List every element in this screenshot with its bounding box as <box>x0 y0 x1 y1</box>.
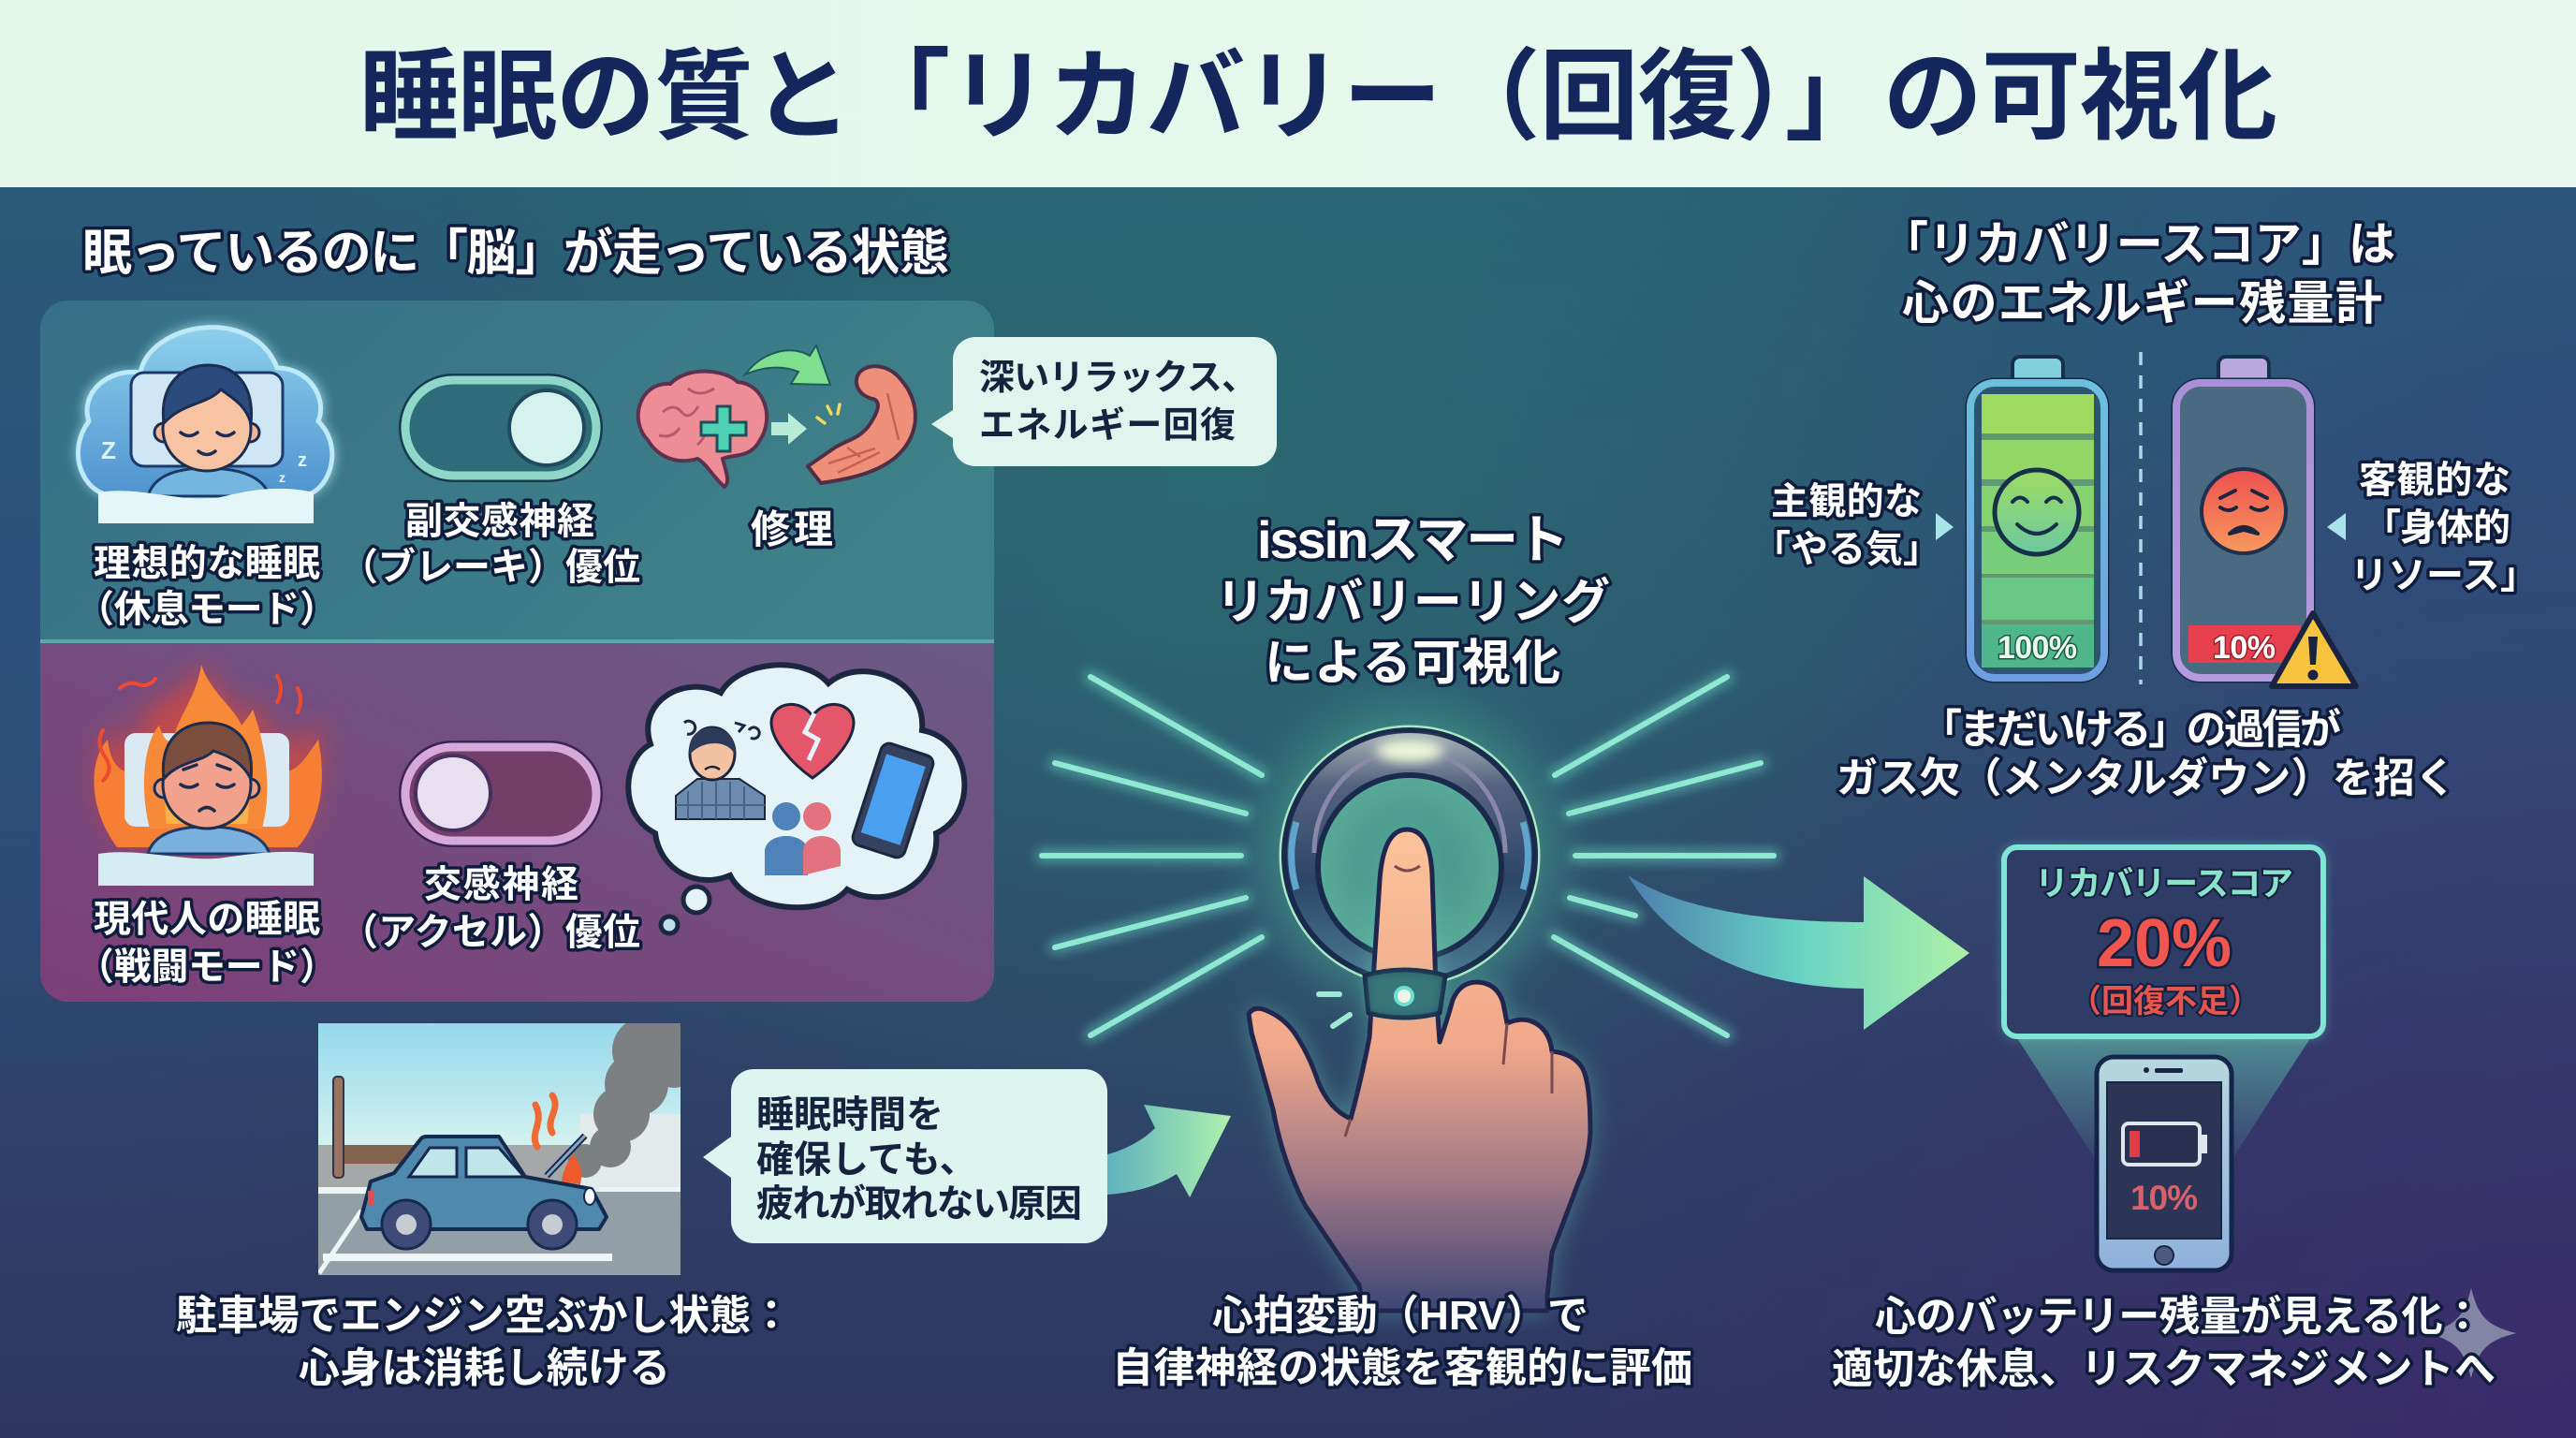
arrow: callout to hand <box>1107 1105 1231 1197</box>
people <box>765 802 841 875</box>
divider <box>2139 352 2143 684</box>
label: HRV caption <box>1112 1293 1692 1391</box>
callout: sleep hours: 睡眠時間を <box>756 1094 944 1136</box>
label: modern sleep: 現代人の睡眠 <box>94 899 320 940</box>
label: ideal sleep: 理想的な睡眠 <box>94 543 320 584</box>
label: ideal sleep: （休息モード） <box>77 589 337 630</box>
label: car caption: 心身は消耗し続ける <box>299 1345 670 1391</box>
icon: low battery objective: 10% <box>2213 630 2276 666</box>
icon: hand with ring <box>1249 829 1590 1311</box>
icon: accelerator toggle <box>403 745 598 843</box>
label: HRV caption: 心拍変動（HRV）で <box>1212 1293 1588 1339</box>
heading: ring visualisation: による可視化 <box>1265 637 1560 691</box>
broken heart <box>771 704 854 778</box>
watermark sparkle <box>2427 1288 2516 1378</box>
heading: ring visualisation: issinスマート <box>1257 510 1569 569</box>
car body <box>361 1137 607 1229</box>
label: ideal sleep <box>77 543 337 630</box>
heading: recovery score <box>1881 218 2395 330</box>
icon: muscle arm <box>808 366 915 483</box>
callout: deep relaxation: 深いリラックス、 <box>979 359 1257 398</box>
icon: full battery motivation: 100% <box>1998 630 2077 666</box>
icon: low battery objective <box>2174 357 2356 686</box>
label: subjective motivation: 「やる気」 <box>1753 529 1940 570</box>
icon: brain repair <box>638 372 767 487</box>
icon: brake toggle <box>403 378 598 477</box>
worried person <box>676 721 765 819</box>
icon: ideal sleep: Z <box>101 436 116 464</box>
icon: ideal sleep: z <box>279 470 285 485</box>
heading: recovery score: 心のエネルギー残量計 <box>1902 277 2382 330</box>
arrow: to muscle <box>771 413 807 445</box>
label: car caption <box>176 1293 792 1391</box>
label: modern sleep <box>77 899 337 988</box>
smartphone <box>851 741 935 859</box>
callout: sleep hours <box>703 1069 1107 1243</box>
label: objective resources <box>2327 460 2538 596</box>
label: battery visibility caption: 心のバッテリー残量が見える化： <box>1875 1294 2483 1340</box>
label: objective resources: 客観的な <box>2359 460 2510 501</box>
label: overconfidence warning: ガス欠（メンタルダウン）を招く <box>1837 756 2456 801</box>
panel: sleep comparison <box>40 301 994 1002</box>
illustration: car idling in parking lot <box>318 1023 681 1275</box>
label: car caption: 駐車場でエンジン空ぶかし状態： <box>176 1293 792 1339</box>
label: parasympathetic <box>341 501 640 588</box>
icon: battle-mode sleep <box>94 663 322 886</box>
icon: smart ring <box>1269 715 1550 996</box>
ring band on finger <box>1365 970 1445 1018</box>
arrow: curved repair arrow <box>745 345 830 385</box>
icon: smartphone battery <box>2097 1057 2232 1270</box>
panel: score display: 20% <box>2097 906 2232 981</box>
label: parasympathetic: 副交感神経 <box>405 501 594 542</box>
label: overconfidence warning: 「まだいける」の過信が <box>1921 707 2341 753</box>
icon: ideal sleep <box>77 325 335 523</box>
label: objective resources: 「身体的 <box>2364 507 2510 549</box>
label: sympathetic <box>341 864 640 953</box>
callout: sleep hours: 疲れが取れない原因 <box>756 1183 1082 1225</box>
title band <box>0 0 2576 187</box>
icon: worry thought cloud <box>628 665 964 933</box>
panel: score display: （回復不足） <box>2070 984 2261 1020</box>
heat flames <box>534 1095 555 1147</box>
panel: score display <box>2002 845 2325 1157</box>
heading: ring visualisation: リカバリーリング <box>1216 576 1610 630</box>
arrow: ring to score <box>1628 875 1969 1030</box>
label: modern sleep: （戦闘モード） <box>77 946 337 988</box>
label: repair: 修理 <box>751 507 833 551</box>
label: objective resources: リソース」 <box>2350 555 2538 596</box>
label: subjective motivation: 主観的な <box>1771 481 1922 522</box>
callout: sleep hours: 確保しても、 <box>756 1139 977 1181</box>
label: battery visibility caption <box>1832 1294 2496 1392</box>
heading: brain running while asleep: 眠っているのに「脳」が走っている状態 <box>82 226 949 281</box>
icon: smartphone battery: 10% <box>2130 1179 2198 1217</box>
callout: deep relaxation: エネルギー回復 <box>979 406 1236 446</box>
smoke <box>568 1023 681 1178</box>
icon: glow rays <box>1042 677 1774 1035</box>
label: HRV caption: 自律神経の状態を客観的に評価 <box>1112 1345 1692 1391</box>
label: sympathetic: 交感神経 <box>424 864 578 905</box>
heading: ring visualisation <box>1216 510 1610 691</box>
callout: deep relaxation <box>931 337 1277 466</box>
panel: score display: リカバリースコア <box>2035 864 2293 902</box>
sad face <box>2202 469 2286 553</box>
label: sympathetic: （アクセル）優位 <box>341 912 640 953</box>
smile face <box>1995 470 2079 554</box>
label: battery visibility caption: 適切な休息、リスクマネジメントへ <box>1832 1346 2496 1392</box>
warning sign <box>2272 613 2356 686</box>
label: parasympathetic: （ブレーキ）優位 <box>341 547 640 588</box>
icon: full battery motivation <box>1969 357 2106 680</box>
label: subjective motivation <box>1753 481 1954 570</box>
icon: ideal sleep: z <box>298 450 307 471</box>
label: overconfidence warning <box>1837 707 2456 801</box>
heading: recovery score: 「リカバリースコア」は <box>1881 218 2395 271</box>
title: 睡眠の質と「リカバリー（回復）」の可視化 <box>359 42 2277 153</box>
